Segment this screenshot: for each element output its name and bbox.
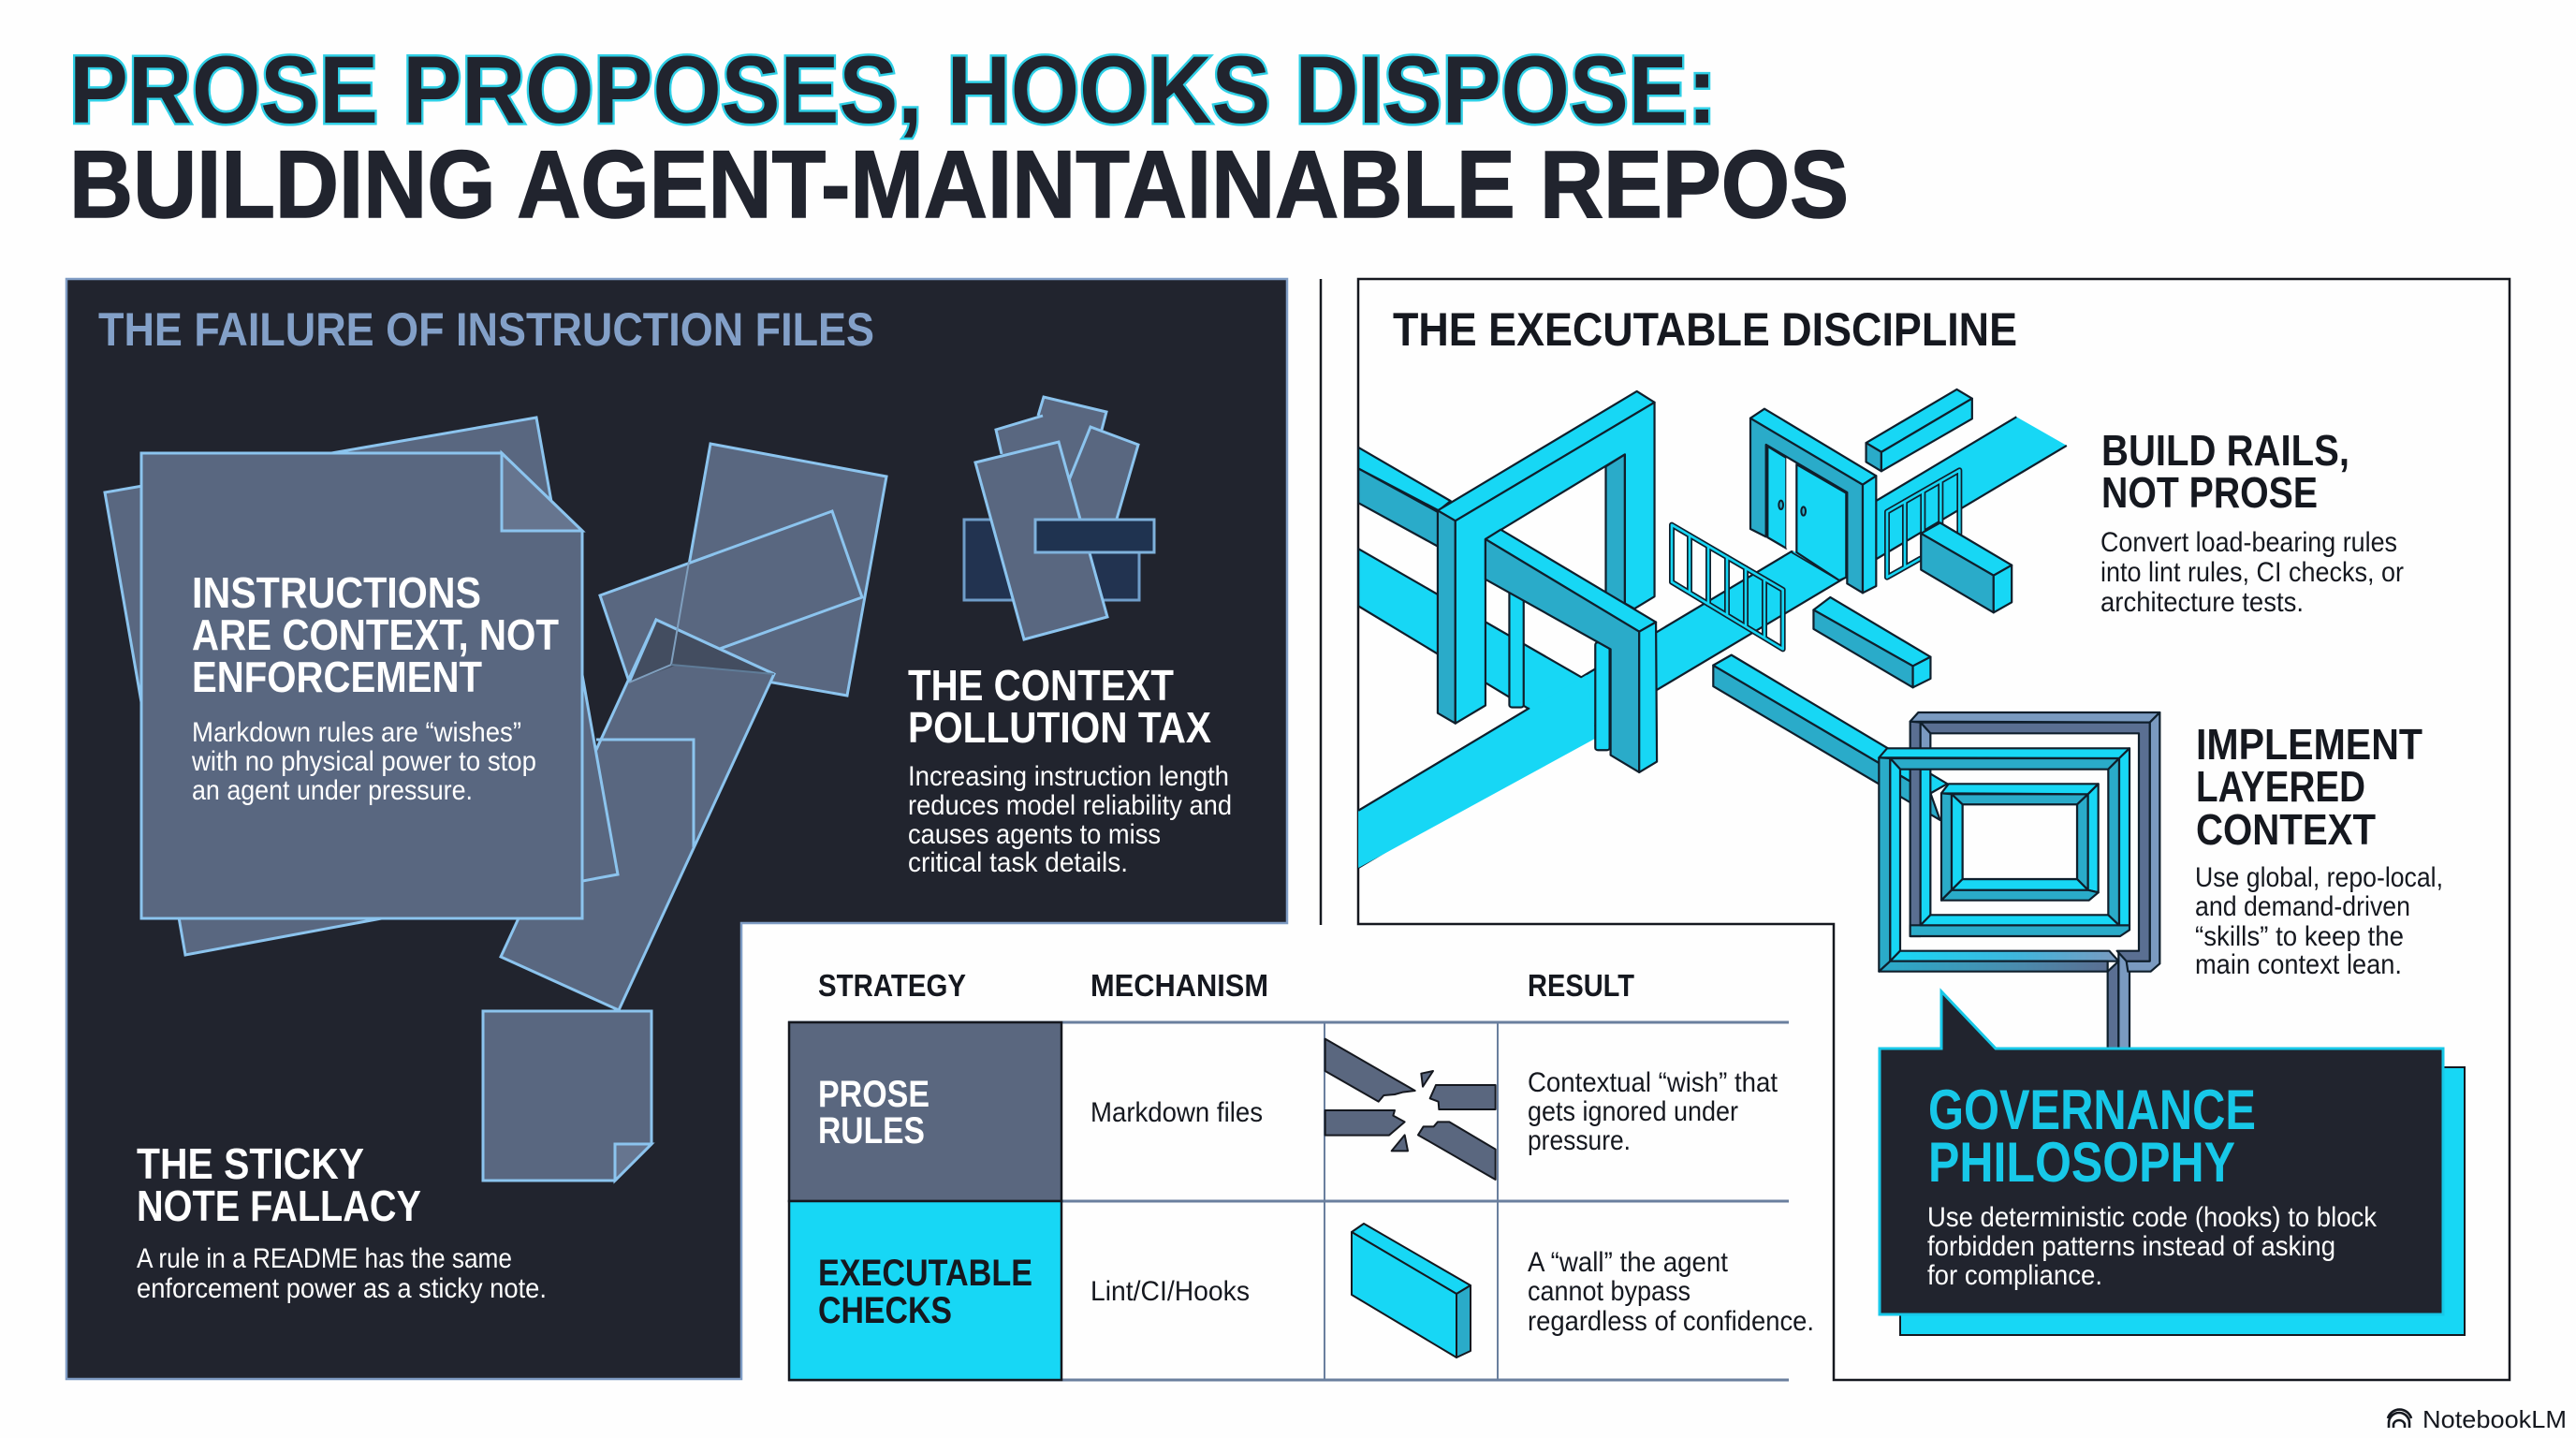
text: sticky note fallacy: NOTE FALLACY bbox=[137, 1181, 421, 1230]
text: sticky note fallacy: A rule in a README has the same bbox=[137, 1243, 512, 1274]
callout: governance philosophy bbox=[1880, 991, 2465, 1335]
row: prose rules: Markdown files bbox=[1090, 1097, 1263, 1128]
callout: governance philosophy: GOVERNANCE bbox=[1928, 1078, 2256, 1141]
text: implement layered context: “skills” to keep the bbox=[2195, 921, 2404, 952]
callout: governance philosophy: for compliance. bbox=[1927, 1260, 2102, 1291]
text: build rails: into lint rules, CI checks, or bbox=[2100, 557, 2404, 588]
callout: instructions are context: with no physical power to stop bbox=[191, 746, 536, 777]
icon: scattered document pile bbox=[105, 418, 886, 1010]
row: prose rules: Contextual “wish” that bbox=[1528, 1067, 1778, 1098]
text: implement layered context: LAYERED bbox=[2196, 762, 2365, 811]
table header: STRATEGY bbox=[818, 968, 966, 1003]
text: implement layered context: Use global, repo-local, bbox=[2195, 862, 2443, 893]
panel: the executable discipline bbox=[1358, 279, 2510, 1380]
text: implement layered context: main context lean. bbox=[2195, 949, 2402, 980]
text: implement layered context: IMPLEMENT bbox=[2196, 720, 2422, 769]
panel heading: failure: THE FAILURE OF INSTRUCTION FILES bbox=[98, 303, 874, 356]
callout: instructions are context: INSTRUCTIONS bbox=[192, 568, 481, 617]
text: build rails bbox=[2100, 426, 2404, 618]
callout: instructions are context: an agent under pressure. bbox=[192, 775, 473, 806]
row: executable checks: EXECUTABLE bbox=[818, 1253, 1032, 1294]
middle cyan ring bbox=[1890, 758, 2119, 770]
text: build rails: architecture tests. bbox=[2100, 587, 2304, 618]
callout: governance philosophy: PHILOSOPHY bbox=[1928, 1131, 2235, 1194]
icon: door and gates bbox=[1672, 409, 1959, 649]
row: prose rules bbox=[789, 1022, 1778, 1201]
text: implement layered context bbox=[2195, 720, 2443, 980]
text: context pollution tax: POLLUTION TAX bbox=[908, 703, 1211, 752]
row: executable checks: Lint/CI/Hooks bbox=[1090, 1276, 1250, 1307]
table header: MECHANISM bbox=[1090, 968, 1268, 1003]
row: prose rules: pressure. bbox=[1528, 1125, 1631, 1156]
title bbox=[69, 37, 1849, 238]
row: executable checks: CHECKS bbox=[818, 1290, 952, 1331]
text: build rails: NOT PROSE bbox=[2101, 468, 2318, 517]
stem bbox=[2108, 961, 2118, 1049]
table header: RESULT bbox=[1528, 968, 1634, 1003]
text: sticky note fallacy: THE STICKY bbox=[137, 1139, 364, 1188]
table: strategy comparison bbox=[788, 968, 1814, 1380]
text: context pollution tax: reduces model reliability and bbox=[908, 790, 1232, 821]
text: context pollution tax: causes agents to miss bbox=[908, 819, 1161, 850]
outer slate ring bbox=[1910, 712, 2159, 723]
callout: instructions are context: Markdown rules are “wishes” bbox=[192, 717, 521, 748]
text: build rails: BUILD RAILS, bbox=[2101, 426, 2349, 475]
callout: governance philosophy: Use deterministic code (hooks) to block bbox=[1927, 1202, 2378, 1233]
icon: broken barriers bbox=[1325, 1039, 1496, 1180]
row: prose rules: gets ignored under bbox=[1528, 1096, 1738, 1127]
text: sticky note fallacy: enforcement power as a sticky note. bbox=[137, 1273, 547, 1304]
text: context pollution tax: Increasing instruction length bbox=[908, 761, 1229, 792]
text: build rails: Convert load-bearing rules bbox=[2100, 527, 2397, 558]
title: BUILDING AGENT-MAINTAINABLE REPOS bbox=[69, 131, 1849, 238]
icon: sticky note bbox=[483, 1011, 651, 1181]
text: sticky note fallacy bbox=[137, 1139, 547, 1304]
callout: instructions are context: ENFORCEMENT bbox=[192, 653, 482, 701]
row: prose rules: RULES bbox=[818, 1110, 925, 1152]
callout: instructions are context bbox=[191, 568, 559, 806]
callout: governance philosophy: forbidden patterns instead of asking bbox=[1927, 1231, 2335, 1262]
table header bbox=[818, 968, 1634, 1003]
illustration: isometric rails, gates and doors bbox=[1358, 389, 2067, 868]
panel heading: discipline: THE EXECUTABLE DISCIPLINE bbox=[1393, 303, 2017, 356]
icon: context pollution stack bbox=[964, 397, 1154, 639]
logo: NotebookLM: NotebookLM bbox=[2422, 1405, 2567, 1433]
text: context pollution tax bbox=[908, 661, 1232, 878]
row: prose rules: PROSE bbox=[818, 1074, 929, 1115]
text: implement layered context: CONTEXT bbox=[2196, 805, 2376, 854]
row: executable checks: cannot bypass bbox=[1528, 1276, 1690, 1307]
row: executable checks bbox=[789, 1201, 1814, 1380]
text: context pollution tax: THE CONTEXT bbox=[908, 661, 1174, 710]
callout: instructions are context: ARE CONTEXT, NOT bbox=[192, 610, 559, 659]
title: PROSE PROPOSES, HOOKS DISPOSE: bbox=[69, 37, 1717, 143]
text: implement layered context: and demand-driven bbox=[2195, 891, 2410, 922]
row: executable checks: A “wall” the agent bbox=[1528, 1247, 1729, 1278]
inner ring bbox=[1952, 794, 2088, 804]
row: executable checks: regardless of confidence. bbox=[1528, 1306, 1814, 1337]
illustration: nested context layers bbox=[1879, 712, 2159, 1049]
text: context pollution tax: critical task details. bbox=[908, 847, 1128, 878]
icon: wall bbox=[1352, 1224, 1471, 1357]
panel: the failure of instruction files bbox=[66, 279, 1287, 1379]
